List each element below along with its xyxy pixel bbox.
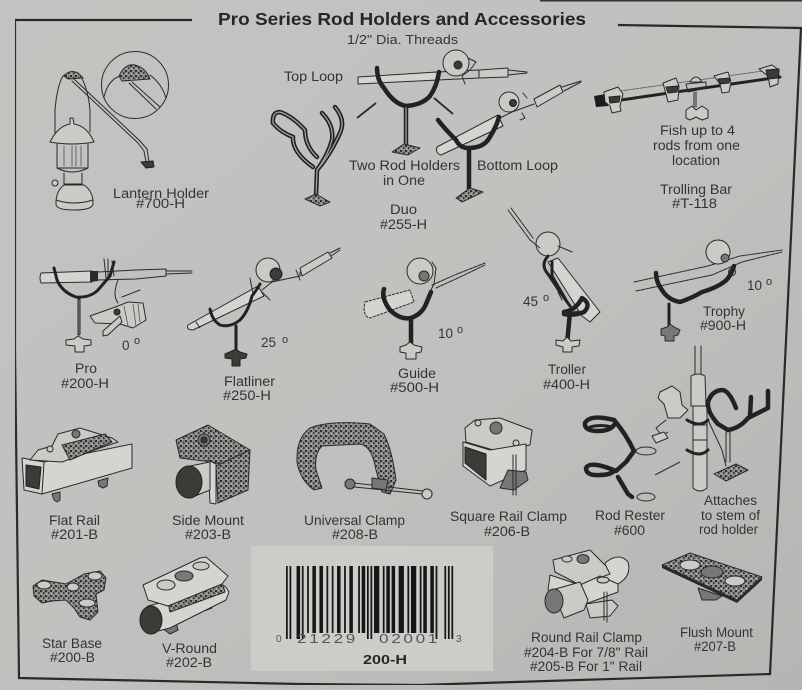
label: rod rester: Rod Rester bbox=[595, 508, 666, 523]
label: v-round bbox=[162, 641, 217, 670]
icon: duo holder side view bbox=[273, 107, 342, 206]
label: trolling bar bbox=[660, 182, 733, 211]
label: 10 degrees: o bbox=[457, 324, 463, 336]
label: flat rail: #201-B bbox=[51, 527, 98, 542]
icon: guide rod holder bbox=[364, 258, 485, 359]
barcode digits: 3 bbox=[456, 634, 462, 645]
label: duo bbox=[380, 202, 427, 232]
icon: side mount bbox=[176, 425, 250, 504]
label: flat rail bbox=[49, 513, 100, 542]
product: duo bbox=[273, 50, 581, 232]
product: rod rester bbox=[585, 418, 666, 538]
label: universal clamp: Universal Clamp bbox=[304, 513, 405, 528]
label: side mount bbox=[172, 513, 244, 542]
product: troller bbox=[508, 208, 600, 392]
label: v-round: #202-B bbox=[166, 655, 212, 670]
product: stem attachment bbox=[652, 346, 768, 537]
label: round rail clamp: #205-B For 1" Rail bbox=[530, 659, 642, 674]
label: 10 degrees bbox=[747, 276, 772, 293]
product: flatliner bbox=[188, 248, 340, 403]
label: flatliner: Flatliner bbox=[224, 374, 276, 389]
barcode digits: 0 bbox=[276, 634, 282, 645]
label: 0 degrees: o bbox=[134, 335, 140, 347]
subtitle: 1/2" Dia. Threads bbox=[347, 32, 459, 47]
label: round rail clamp bbox=[524, 630, 648, 674]
label: 45 degrees bbox=[523, 292, 549, 309]
label: star base: Star Base bbox=[42, 636, 102, 651]
label: round rail clamp: Round Rail Clamp bbox=[531, 630, 642, 645]
label: 25 degrees: o bbox=[282, 334, 288, 346]
barcode digits: 21229 bbox=[297, 631, 358, 646]
product: side mount bbox=[172, 425, 250, 542]
label: rod rester bbox=[595, 508, 666, 538]
label: fish up to 4 rods: rods from one bbox=[653, 138, 740, 153]
pointer stroke: rod rester to stem bbox=[655, 462, 680, 475]
icon: star base bbox=[33, 571, 106, 620]
icon: flat rail base bbox=[22, 428, 132, 502]
label: trolling bar: #T-118 bbox=[672, 196, 717, 211]
label: v-round: V-Round bbox=[162, 641, 217, 656]
label: guide bbox=[390, 366, 439, 395]
label: pro: #200-H bbox=[61, 376, 109, 391]
icon: V-round base bbox=[140, 557, 229, 634]
label: duo: #255-H bbox=[380, 217, 427, 232]
label: rod rester: #600 bbox=[614, 523, 645, 538]
label: 10 degrees: o bbox=[766, 276, 772, 288]
label: pro bbox=[61, 361, 109, 391]
label: 10 degrees: 10 bbox=[438, 326, 453, 341]
label: star base: #200-B bbox=[50, 650, 95, 665]
label: flush mount: Flush Mount bbox=[680, 625, 753, 640]
label: lantern holder: #700-H bbox=[136, 196, 185, 211]
label: duo: Duo bbox=[390, 202, 417, 217]
product: lantern holder bbox=[50, 52, 210, 211]
label: flatliner: #250-H bbox=[223, 388, 271, 403]
label: flush mount: #207-B bbox=[694, 639, 736, 654]
label: lantern holder bbox=[113, 186, 210, 211]
label: 10 degrees bbox=[438, 324, 463, 341]
product: star base bbox=[33, 571, 106, 665]
label: attaches to stem: Attaches bbox=[704, 493, 757, 508]
icon: square rail clamp bbox=[463, 418, 532, 495]
label: round rail clamp: #204-B For 7/8" Rail bbox=[524, 645, 648, 660]
label: trophy bbox=[700, 304, 746, 333]
icon: flatliner rod holder bbox=[188, 248, 340, 366]
label: 25 degrees bbox=[261, 334, 288, 350]
icon: troller rod holder bbox=[508, 208, 600, 352]
label: fish up to 4 rods: Fish up to 4 bbox=[660, 123, 736, 138]
label: fish up to 4 rods: location bbox=[672, 153, 720, 168]
label: universal clamp bbox=[304, 513, 405, 542]
label: square rail clamp bbox=[450, 509, 567, 539]
label: attaches to stem: rod holder bbox=[699, 522, 758, 537]
top edge shadow bbox=[540, 0, 802, 2]
label: square rail clamp: #206-B bbox=[484, 524, 530, 539]
icon: trolling bar bbox=[594, 65, 780, 120]
barcode digits bbox=[276, 631, 462, 646]
product: round rail clamp bbox=[524, 550, 648, 674]
icon: round rail clamp bbox=[545, 550, 629, 622]
label: side mount: #203-B bbox=[185, 527, 231, 542]
icon: bottom loop holder with rod and reel bbox=[436, 81, 581, 202]
label: flat rail: Flat Rail bbox=[49, 513, 100, 528]
product: v-round bbox=[140, 557, 229, 670]
label: 0 degrees: 0 bbox=[122, 338, 130, 353]
title: Pro Series Rod Holders and Accessories bbox=[218, 9, 586, 29]
label: trolling bar: Trolling Bar bbox=[660, 182, 733, 197]
label: 45 degrees: 45 bbox=[523, 294, 538, 309]
barcode panel background bbox=[251, 546, 493, 671]
label: fish up to 4 rods bbox=[653, 123, 740, 168]
label: two rod holders in one: in One bbox=[383, 173, 425, 188]
label: 0 degrees bbox=[122, 335, 140, 353]
icon: pro rod holder with spinning reel bbox=[40, 259, 192, 352]
icon: rod rester bbox=[585, 418, 656, 501]
barcode digits: 02001 bbox=[379, 631, 440, 646]
label: star base bbox=[42, 636, 102, 665]
product: trophy bbox=[634, 240, 782, 341]
label: two rod holders in one: Two Rod Holders bbox=[349, 158, 460, 173]
divider stroke: left bbox=[357, 103, 376, 118]
label: flush mount bbox=[680, 625, 753, 654]
label: trophy: Trophy bbox=[703, 304, 745, 319]
label: square rail clamp: Square Rail Clamp bbox=[450, 509, 567, 524]
label: attaches to stem: to stem of bbox=[701, 508, 760, 523]
product: square rail clamp bbox=[450, 418, 567, 539]
divider stroke: right bbox=[434, 98, 453, 114]
product: flush mount bbox=[662, 553, 762, 654]
label: troller: Troller bbox=[548, 362, 586, 377]
label: guide: #500-H bbox=[390, 380, 439, 395]
icon: C clamp bbox=[297, 423, 432, 499]
barcode bars bbox=[286, 566, 453, 639]
label: 25 degrees: 25 bbox=[261, 335, 276, 350]
product: guide bbox=[364, 258, 485, 395]
icon: rod rester on stem with reel bbox=[652, 346, 768, 491]
icon: trophy rod holder bbox=[634, 240, 782, 341]
label: guide: Guide bbox=[398, 366, 436, 381]
product: universal clamp bbox=[297, 423, 432, 542]
label: trophy: #900-H bbox=[700, 318, 746, 333]
label: pro: Pro bbox=[75, 361, 97, 376]
label: troller bbox=[543, 362, 590, 392]
label: universal clamp: #208-B bbox=[332, 527, 378, 542]
product: flat rail bbox=[22, 428, 132, 542]
product: pro bbox=[40, 259, 192, 391]
icon: lantern with rod arm bbox=[50, 52, 168, 210]
label: troller: #400-H bbox=[543, 377, 590, 392]
label: attaches to stem bbox=[699, 493, 760, 537]
label: bottom loop: Bottom Loop bbox=[477, 158, 558, 173]
label: side mount: Side Mount bbox=[172, 513, 244, 528]
barcode bbox=[276, 566, 462, 667]
icon: top loop holder with rod and reel bbox=[358, 50, 527, 155]
label: flatliner bbox=[223, 374, 276, 403]
icon: flush mount bbox=[662, 553, 762, 603]
label: 10 degrees: 10 bbox=[747, 278, 762, 293]
label: 45 degrees: o bbox=[543, 292, 549, 304]
label: lantern holder: Lantern Holder bbox=[113, 186, 210, 201]
label: top loop: Top Loop bbox=[284, 69, 343, 84]
product: trolling bar bbox=[594, 65, 780, 211]
barcode model number: 200-H bbox=[363, 653, 407, 667]
label: two rod holders in one bbox=[349, 158, 460, 188]
